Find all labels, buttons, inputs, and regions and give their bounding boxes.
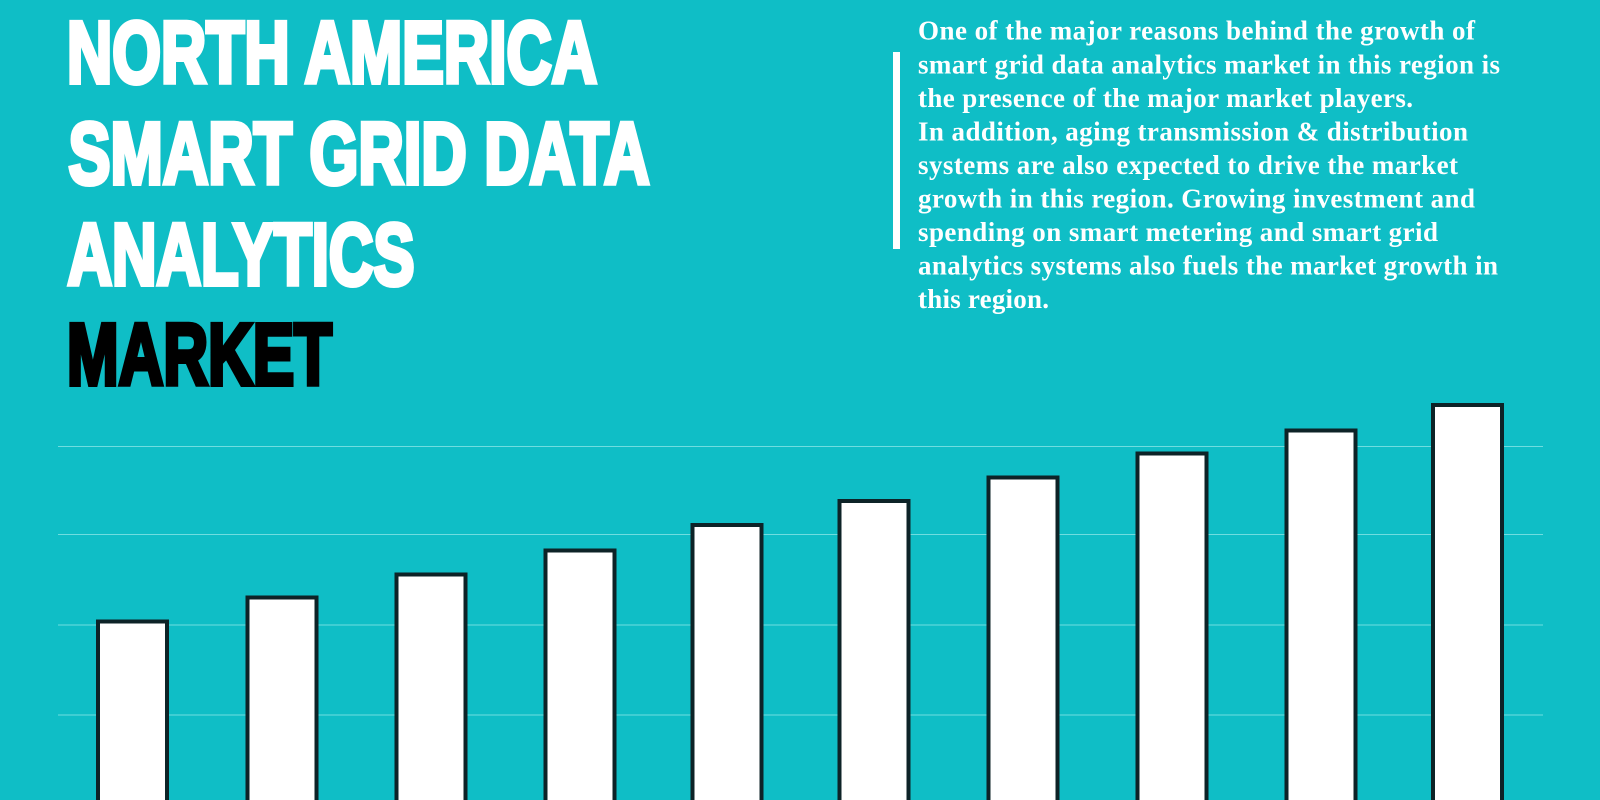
description text block (918, 16, 1500, 314)
bar 10 (1433, 405, 1502, 800)
bar 4 (546, 550, 614, 800)
description text block: In addition, aging transmission & distribution (918, 116, 1468, 146)
bar 3 (396, 574, 466, 800)
description text block: analytics systems also fuels the market growth in (918, 250, 1498, 280)
bar 2 (248, 598, 316, 800)
bar 8 (1138, 454, 1206, 800)
description text block: smart grid data analytics market in this region is (918, 50, 1500, 80)
bar 1 (98, 622, 167, 800)
description text block: the presence of the major market players. (918, 83, 1413, 113)
description text block: this region. (918, 284, 1049, 314)
title line: north america: NORTH AMERICA (67, 4, 597, 102)
title line: market: MARKET (67, 306, 332, 404)
bar 9 (1286, 430, 1356, 800)
bar chart (98, 405, 1502, 800)
title line: analytics: ANALYTICS (68, 206, 414, 304)
bar 6 (840, 501, 908, 800)
description text block: spending on smart metering and smart grid (918, 217, 1438, 247)
bar 7 (988, 478, 1058, 800)
title line: smart grid data: SMART GRID DATA (68, 106, 650, 202)
description text block: systems are also expected to drive the market (918, 150, 1458, 180)
description text block: growth in this region. Growing investment and (918, 184, 1475, 214)
bar 5 (692, 525, 762, 800)
description text block: One of the major reasons behind the growth of (918, 16, 1476, 46)
title (67, 4, 650, 404)
vertical accent bar (893, 52, 900, 249)
